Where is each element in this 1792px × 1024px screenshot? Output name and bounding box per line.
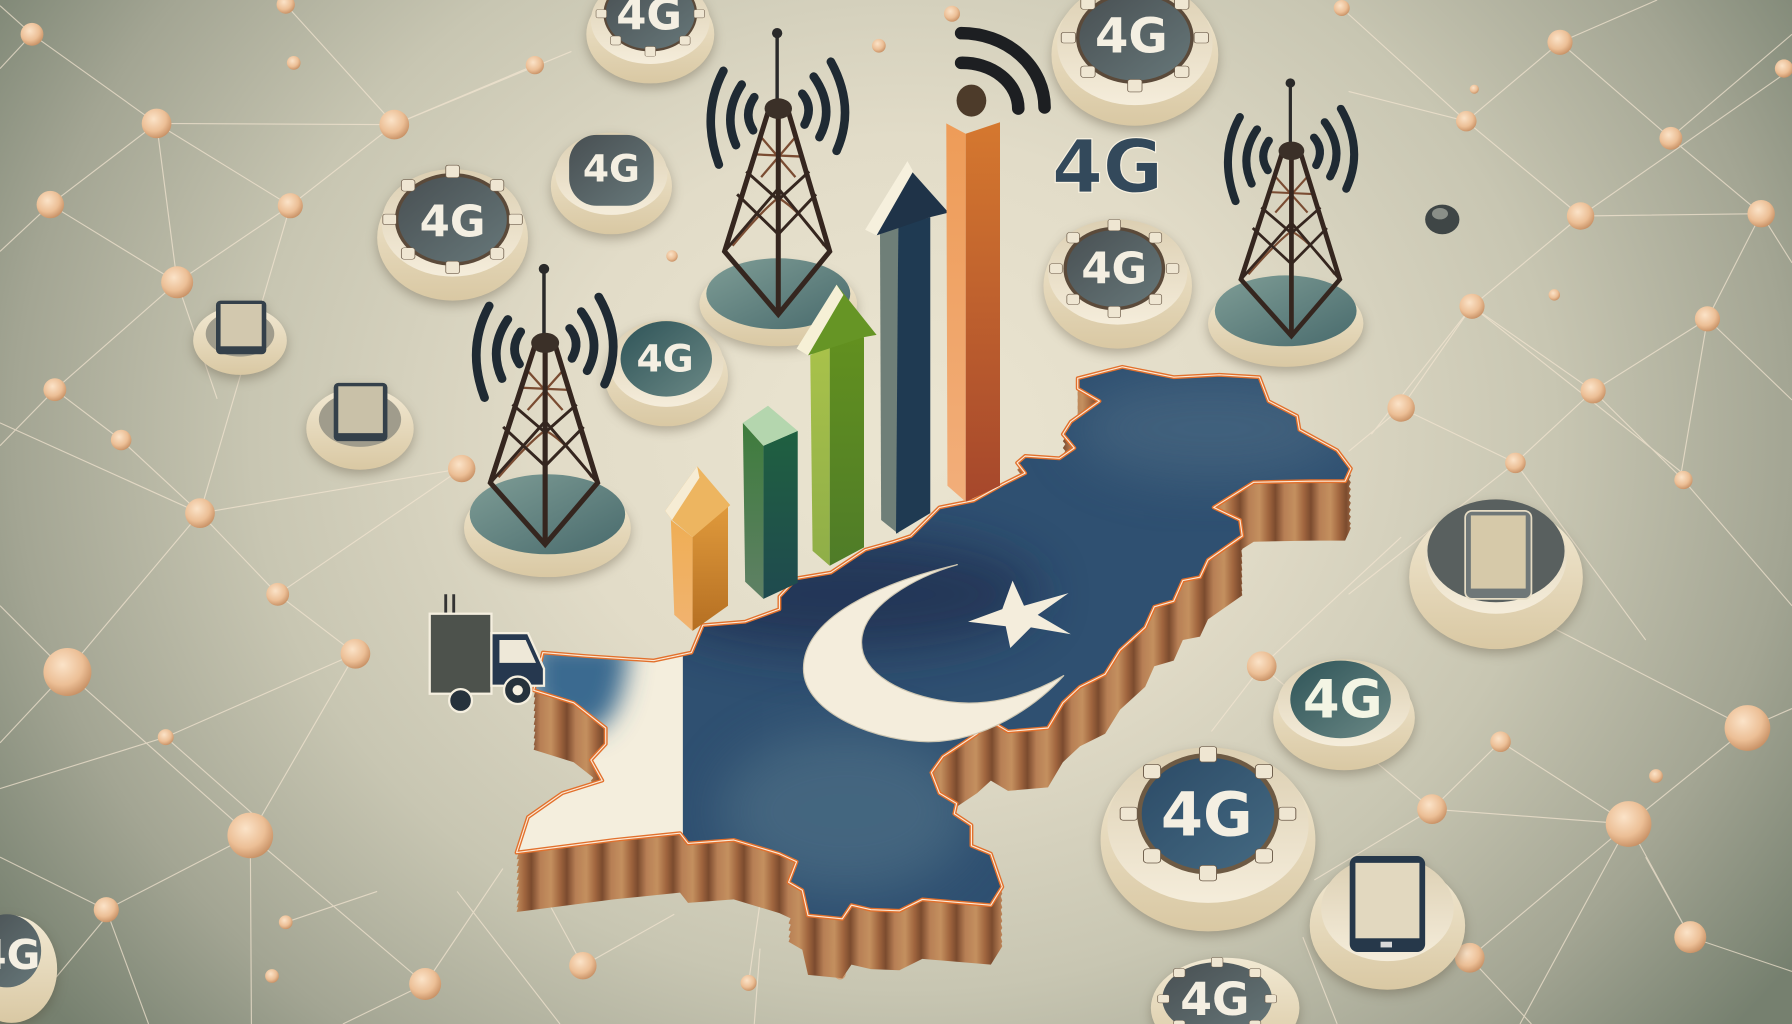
4G badge lower right teal [1273,659,1415,770]
phone badge right large [1409,499,1583,649]
phone badge lower right [1310,856,1465,990]
tower 1 centre [699,28,857,346]
4G badge bottom left edge [0,914,57,1023]
small dark device icon [1425,205,1459,234]
crescent [803,565,1064,742]
map outline [517,367,1351,919]
star [968,581,1071,648]
phone badge left lower [306,383,414,470]
4G badge with studs left: 4G [420,198,485,248]
tower 2 right [1208,78,1363,367]
4G badge right of bars [1043,219,1192,349]
4G badge bottom edge [1151,958,1299,1024]
map extruded wall [517,374,1351,978]
bar 4 navy arrow [865,161,949,534]
4G badge with studs left [377,165,528,301]
4G badge upper left: 4G [583,147,640,191]
4G badge beside tower [605,320,728,426]
4G badge upper left [551,133,672,234]
map top surface [520,368,1349,917]
4G badge right of bars: 4G [1081,244,1147,294]
phone badge left upper [193,301,287,375]
bar 1 orange arrow [665,466,730,631]
large 4G badge [1101,747,1315,931]
4G badge top right [1051,0,1218,126]
bar 3 green arrow [797,285,877,566]
growth chart bars [665,122,1000,631]
map of Pakistan [503,354,1371,978]
icon: wifi signal [957,33,1045,117]
4G badge lower right teal: 4G [1303,670,1383,731]
bar 2 dark green [743,406,798,599]
4G badge top right: 4G [1095,9,1168,65]
4G badge top centre [586,0,714,83]
4G badge beside tower: 4G [637,336,694,380]
tower 3 left [464,264,631,577]
delivery truck [430,594,544,712]
large 4G badge: 4G [1161,780,1253,850]
bar 5 orange column [946,122,1000,502]
standalone 4G label: 4G [1052,125,1163,210]
